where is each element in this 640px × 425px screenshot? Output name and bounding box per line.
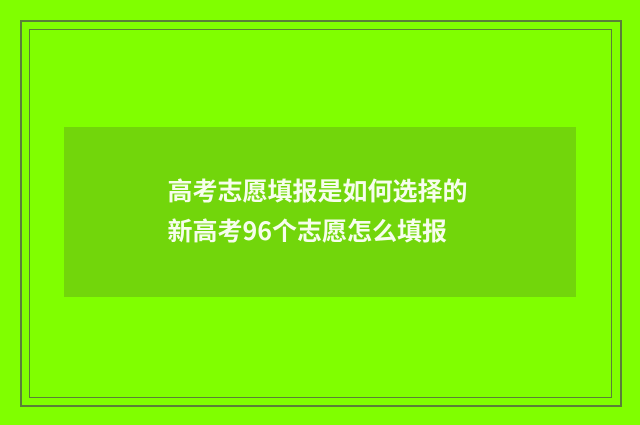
inner border frame xyxy=(29,29,612,398)
title line 2: 新高考96个志愿怎么填报 xyxy=(168,212,447,248)
title line 1: 高考志愿填报是如何选择的 xyxy=(168,172,468,208)
panel: title background xyxy=(64,127,576,297)
